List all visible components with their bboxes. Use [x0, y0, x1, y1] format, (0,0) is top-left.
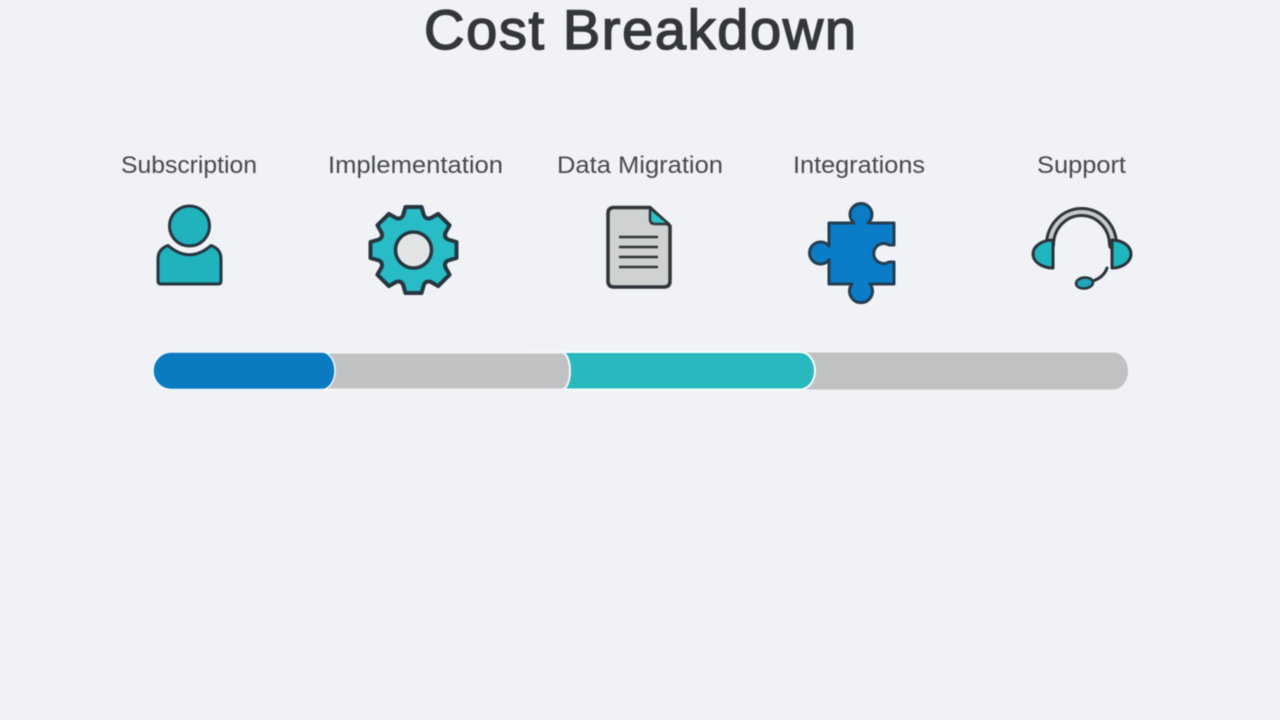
bar segment: data migration (teal) — [530, 352, 815, 390]
icon: document — [608, 208, 670, 287]
column: implementation — [328, 152, 503, 293]
bar segment: support (grey) — [790, 352, 1128, 390]
icon: gear — [370, 207, 456, 293]
label: implementation: Implementation — [328, 152, 503, 179]
column: subscription — [121, 152, 257, 284]
bar segment: subscription (blue) — [153, 352, 335, 390]
column: integrations — [793, 152, 925, 303]
icon: person — [158, 206, 221, 284]
label: subscription: Subscription — [121, 152, 257, 179]
segmented cost bar — [153, 352, 1128, 390]
label: data migration: Data Migration — [557, 152, 723, 179]
label: integrations: Integrations — [793, 152, 925, 179]
column: data migration — [557, 152, 723, 287]
bar segment: implementation (grey) — [300, 352, 570, 390]
icon: puzzle piece — [810, 204, 894, 303]
label: support: Support — [1037, 152, 1126, 179]
column: support — [1033, 152, 1131, 289]
icon: headset — [1033, 212, 1131, 289]
